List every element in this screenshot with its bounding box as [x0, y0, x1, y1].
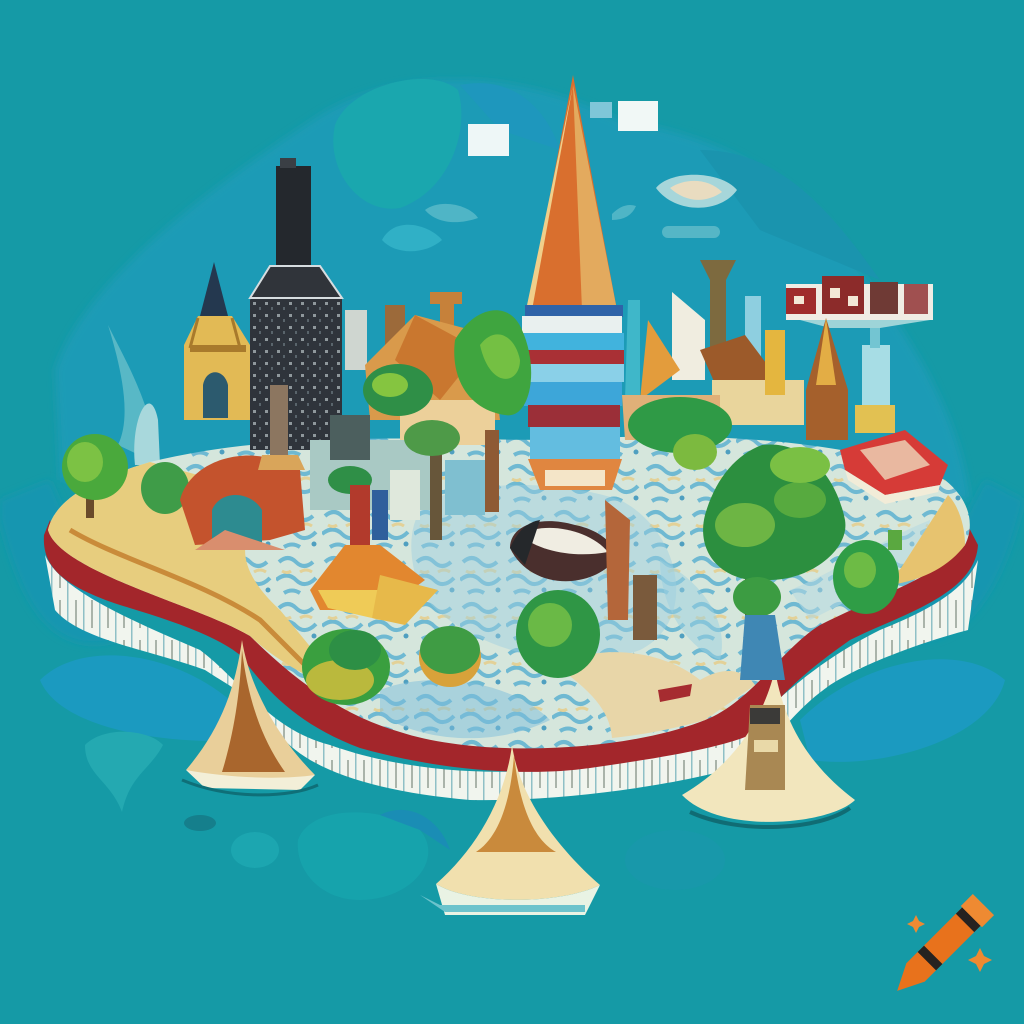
blue water patches on ground	[380, 485, 930, 738]
island surface	[48, 436, 970, 748]
main striped tower	[522, 75, 624, 490]
water shadows below island	[0, 480, 1024, 900]
dark skyscraper	[250, 158, 342, 450]
centre sail support	[420, 745, 600, 915]
logo sparkles	[907, 915, 992, 972]
sandy right shore	[890, 495, 965, 585]
left sail support	[182, 640, 318, 795]
sky glow behind city	[55, 79, 970, 500]
trees right	[628, 397, 902, 680]
clouds and floating objects	[468, 101, 737, 238]
mid-left town houses	[310, 292, 531, 540]
sandy beach bottom right	[555, 652, 755, 738]
island red rim	[44, 520, 978, 772]
floating red building top right	[786, 276, 933, 328]
stone columns	[605, 500, 657, 640]
central bowl	[510, 520, 615, 581]
far left tree	[62, 434, 189, 518]
red tower temple	[310, 485, 438, 625]
red brick ruin and statue	[180, 385, 305, 550]
foreground trees	[302, 590, 600, 705]
left pale spire	[108, 325, 160, 465]
island skirt	[45, 555, 978, 800]
right skyline	[622, 260, 895, 440]
right sail support	[682, 670, 855, 827]
crayon logo	[887, 894, 994, 1001]
red roofed pavilion right	[840, 430, 948, 504]
small red boat	[658, 684, 692, 702]
gothic tower left	[184, 262, 250, 420]
sandy left shore	[48, 462, 350, 695]
